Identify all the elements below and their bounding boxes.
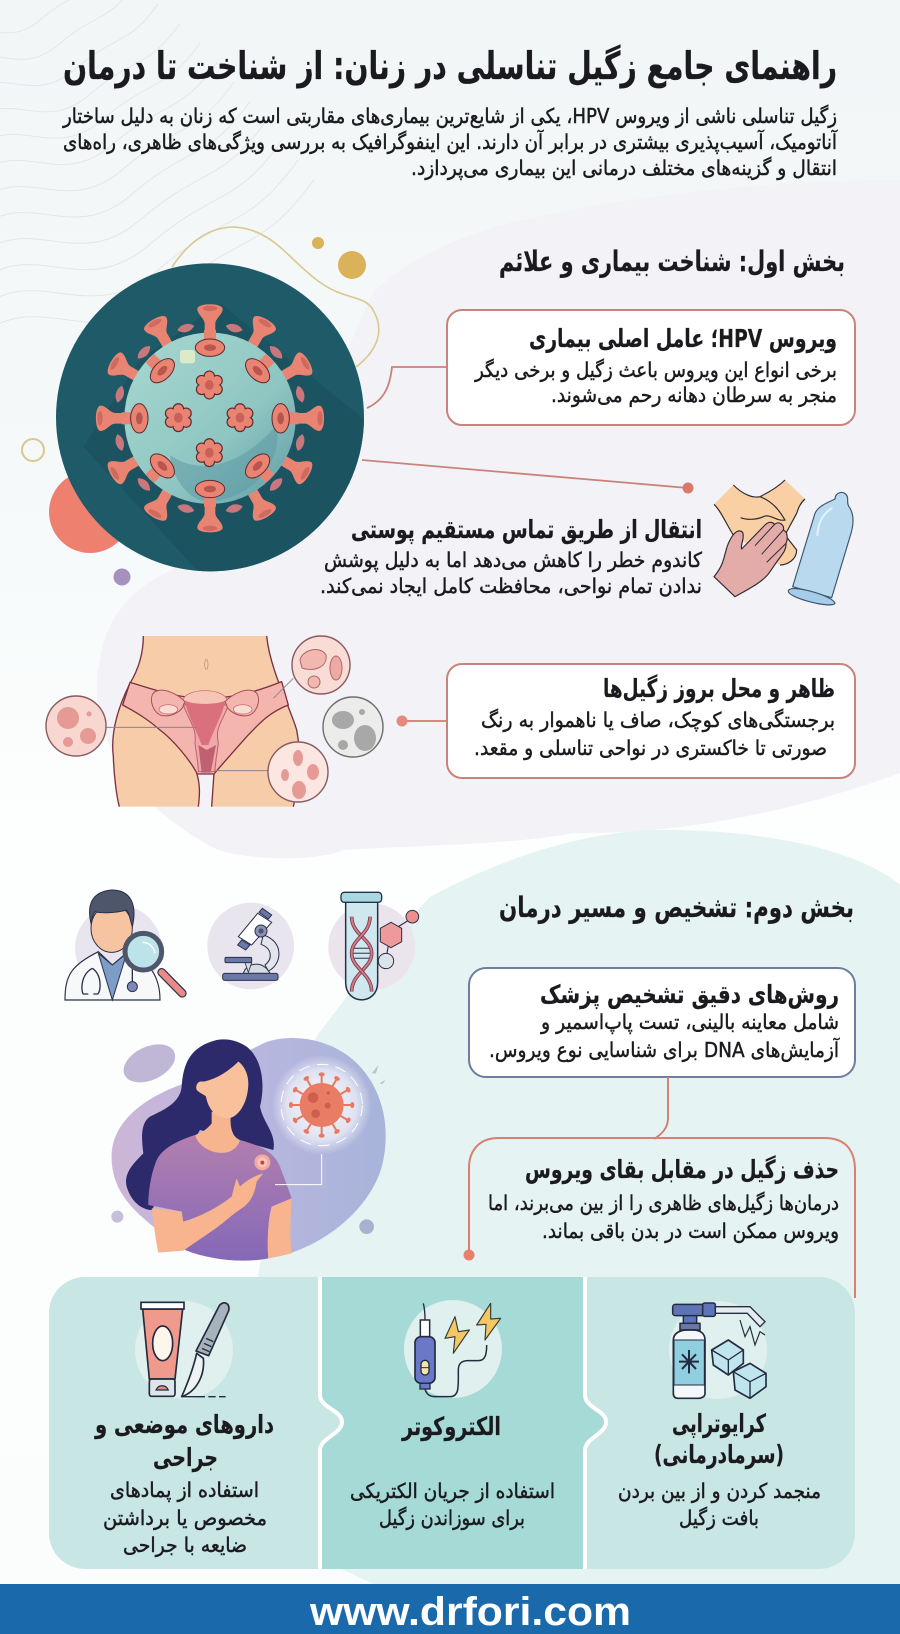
card 1 text: منجر به سرطان دهانه رحم می‌شوند.: [551, 383, 837, 407]
magnified circle: right: [323, 697, 383, 757]
teal background blob: [258, 830, 900, 1590]
coral circle: [49, 471, 131, 553]
panel column: electrocautery: [322, 1277, 605, 1569]
electrocautery text: [350, 1479, 555, 1530]
card: diagnostic methods: [469, 968, 855, 1077]
block: transmission: [320, 515, 702, 598]
column divider: [320, 1277, 606, 1569]
card 4 text: شامل معاینه بالینی، تست پاپ‌اسمیر و: [540, 1010, 839, 1034]
purple dot: [114, 568, 130, 586]
icon: electrocautery pen: [415, 1303, 501, 1397]
cryotherapy heading: (سرمادرمانی): [654, 1440, 784, 1470]
magnified circle: left: [46, 696, 106, 756]
magnified circle: top right: [292, 636, 350, 694]
card 5 text: [488, 1191, 839, 1243]
panel: treatment options: [49, 1277, 855, 1569]
card 5 text: درمان‌ها زگیل‌های ظاهری را از بین می‌برند، اما: [488, 1191, 839, 1215]
card 1 heading: ویروس HPV؛ عامل اصلی بیماری: [529, 324, 837, 354]
card 1 text: [474, 358, 837, 407]
card 3 text: صورتی تا خاکستری در نواحی تناسلی و مقعد.: [474, 736, 827, 760]
electrocautery text: برای سوزاندن زگیل: [379, 1506, 525, 1530]
gold decorative curve: [172, 227, 379, 367]
icon: cream tube and scalpel: [141, 1302, 229, 1397]
electrocautery heading: الکتروکوتر: [400, 1412, 501, 1442]
card 4 text: آزمایش‌های DNA برای شناسایی نوع ویروس.: [489, 1037, 840, 1062]
icon: hands: [714, 480, 805, 597]
topical heading: [93, 1410, 274, 1473]
icon: doctor with magnifier: [65, 890, 182, 1000]
card: appearance and location: [447, 664, 855, 778]
treatment: topical and surgery: [93, 1301, 274, 1557]
illustration: female pelvic anatomy: [105, 636, 300, 807]
frame: wart removal vs virus persistence: [464, 1138, 855, 1298]
intro paragraph: زگیل تناسلی ناشی از ویروس HPV، یکی از شایع‌ترین بیماری‌های مقاربتی است که زنان به دلیل ساختار: [62, 104, 837, 128]
lavender background blob: [97, 180, 900, 858]
block: transmission: انتقال از طریق تماس مستقیم پوستی: [351, 515, 702, 545]
topical text: [103, 1478, 267, 1557]
treatment: electrocautery: [350, 1300, 555, 1530]
gold dots: [312, 237, 366, 279]
intro paragraph: [62, 104, 838, 180]
ring decoration: [22, 439, 44, 461]
connector: diagnosis to treatment: [654, 1077, 668, 1139]
topical text: استفاده از پمادهای: [110, 1478, 259, 1502]
illustration: HPV virus: [56, 263, 373, 573]
card 4 text: [489, 1010, 840, 1062]
cryotherapy heading: کرایوتراپی: [672, 1409, 766, 1439]
footer bar: [0, 1584, 900, 1634]
card 1 text: برخی انواع این ویروس باعث زگیل و برخی دیگر: [474, 358, 837, 382]
card 3 text: [474, 708, 835, 760]
magnified circle: bottom: [268, 742, 328, 802]
transmission text: کاندوم خطر را کاهش می‌دهد اما به دلیل پوشش: [324, 548, 702, 572]
card 3 text: برجستگی‌های کوچک، صاف یا ناهموار به رنگ: [481, 708, 835, 732]
contour line decoration: [0, 0, 314, 337]
cryotherapy heading: [654, 1409, 784, 1470]
icon: cryo spray and ice: [673, 1303, 766, 1398]
connector: virus to card 1: [367, 367, 447, 408]
illustration: woman with virus: [111, 1037, 386, 1261]
treatment: cryotherapy: [618, 1301, 821, 1530]
topical text: ضایعه با جراحی: [123, 1533, 247, 1557]
website address: www.drfori.com: [309, 1590, 631, 1634]
card: HPV main cause: [447, 310, 855, 425]
icon: microscope: [207, 903, 294, 989]
connector: anatomy to card 3: [396, 716, 447, 726]
topical heading: جراحی: [153, 1443, 218, 1473]
transmission text: [320, 548, 702, 598]
cryotherapy text: منجمد کردن و از بین بردن: [618, 1479, 821, 1503]
transmission text: ندادن تمام نواحی، محافظت کامل ایجاد نمی‌کند.: [320, 574, 702, 598]
cryotherapy text: بافت زگیل: [679, 1506, 759, 1530]
intro paragraph: انتقال و گزینه‌های مختلف درمانی این بیماری می‌پردازد.: [411, 156, 837, 180]
electrocautery text: استفاده از جریان الکتریکی: [350, 1479, 555, 1503]
topical text: مخصوص یا برداشتن: [103, 1506, 267, 1530]
card 5 text: ویروس ممکن است در بدن باقی بماند.: [542, 1219, 839, 1243]
topical heading: داروهای موضعی و: [93, 1410, 274, 1440]
icon: DNA test tube: [328, 892, 419, 1000]
cryotherapy text: [618, 1479, 821, 1530]
icon: condom: [788, 492, 853, 605]
connector: virus to transmission: [362, 460, 694, 494]
